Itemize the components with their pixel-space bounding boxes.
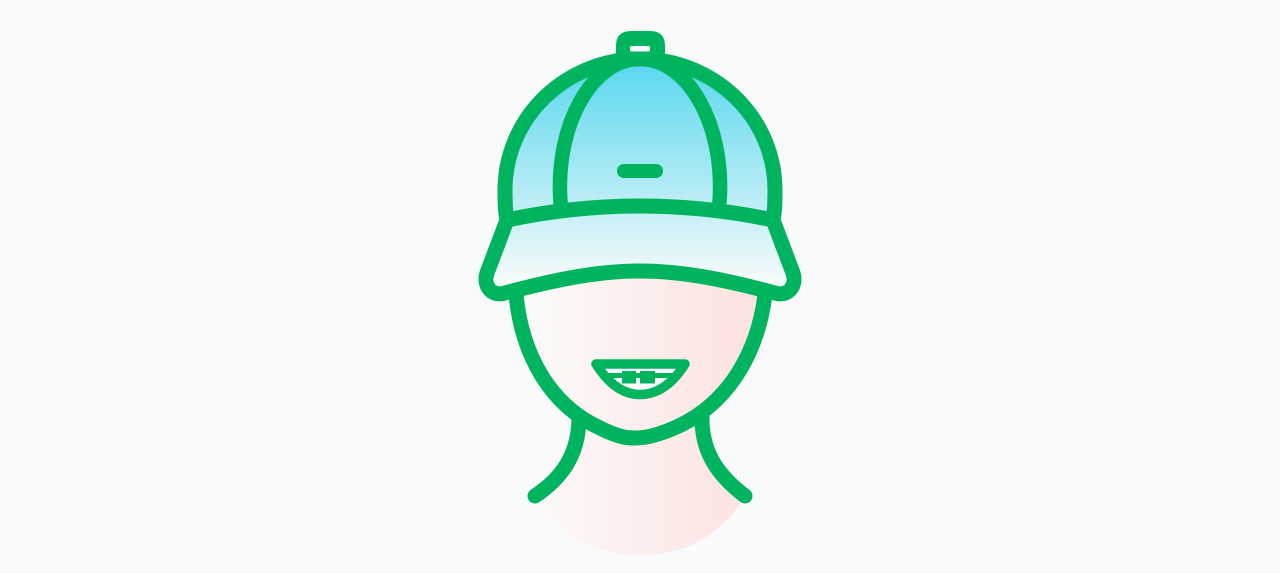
cap dome outline: [505, 59, 775, 220]
braces wire: [605, 373, 675, 378]
cap fill: [486, 59, 794, 294]
bracket right: [640, 371, 655, 384]
cap top button: [616, 31, 665, 60]
face outline: [516, 295, 765, 438]
mouth with braces: [596, 364, 685, 394]
cap brim outline: [486, 206, 794, 294]
mouth shape: [596, 364, 685, 394]
neck right line: [702, 415, 745, 496]
neck and face fill: [516, 250, 765, 555]
cap vent slot: [624, 164, 656, 178]
cap centre panel seams: [560, 59, 720, 208]
neck left line: [535, 420, 579, 496]
bracket left: [622, 371, 636, 384]
